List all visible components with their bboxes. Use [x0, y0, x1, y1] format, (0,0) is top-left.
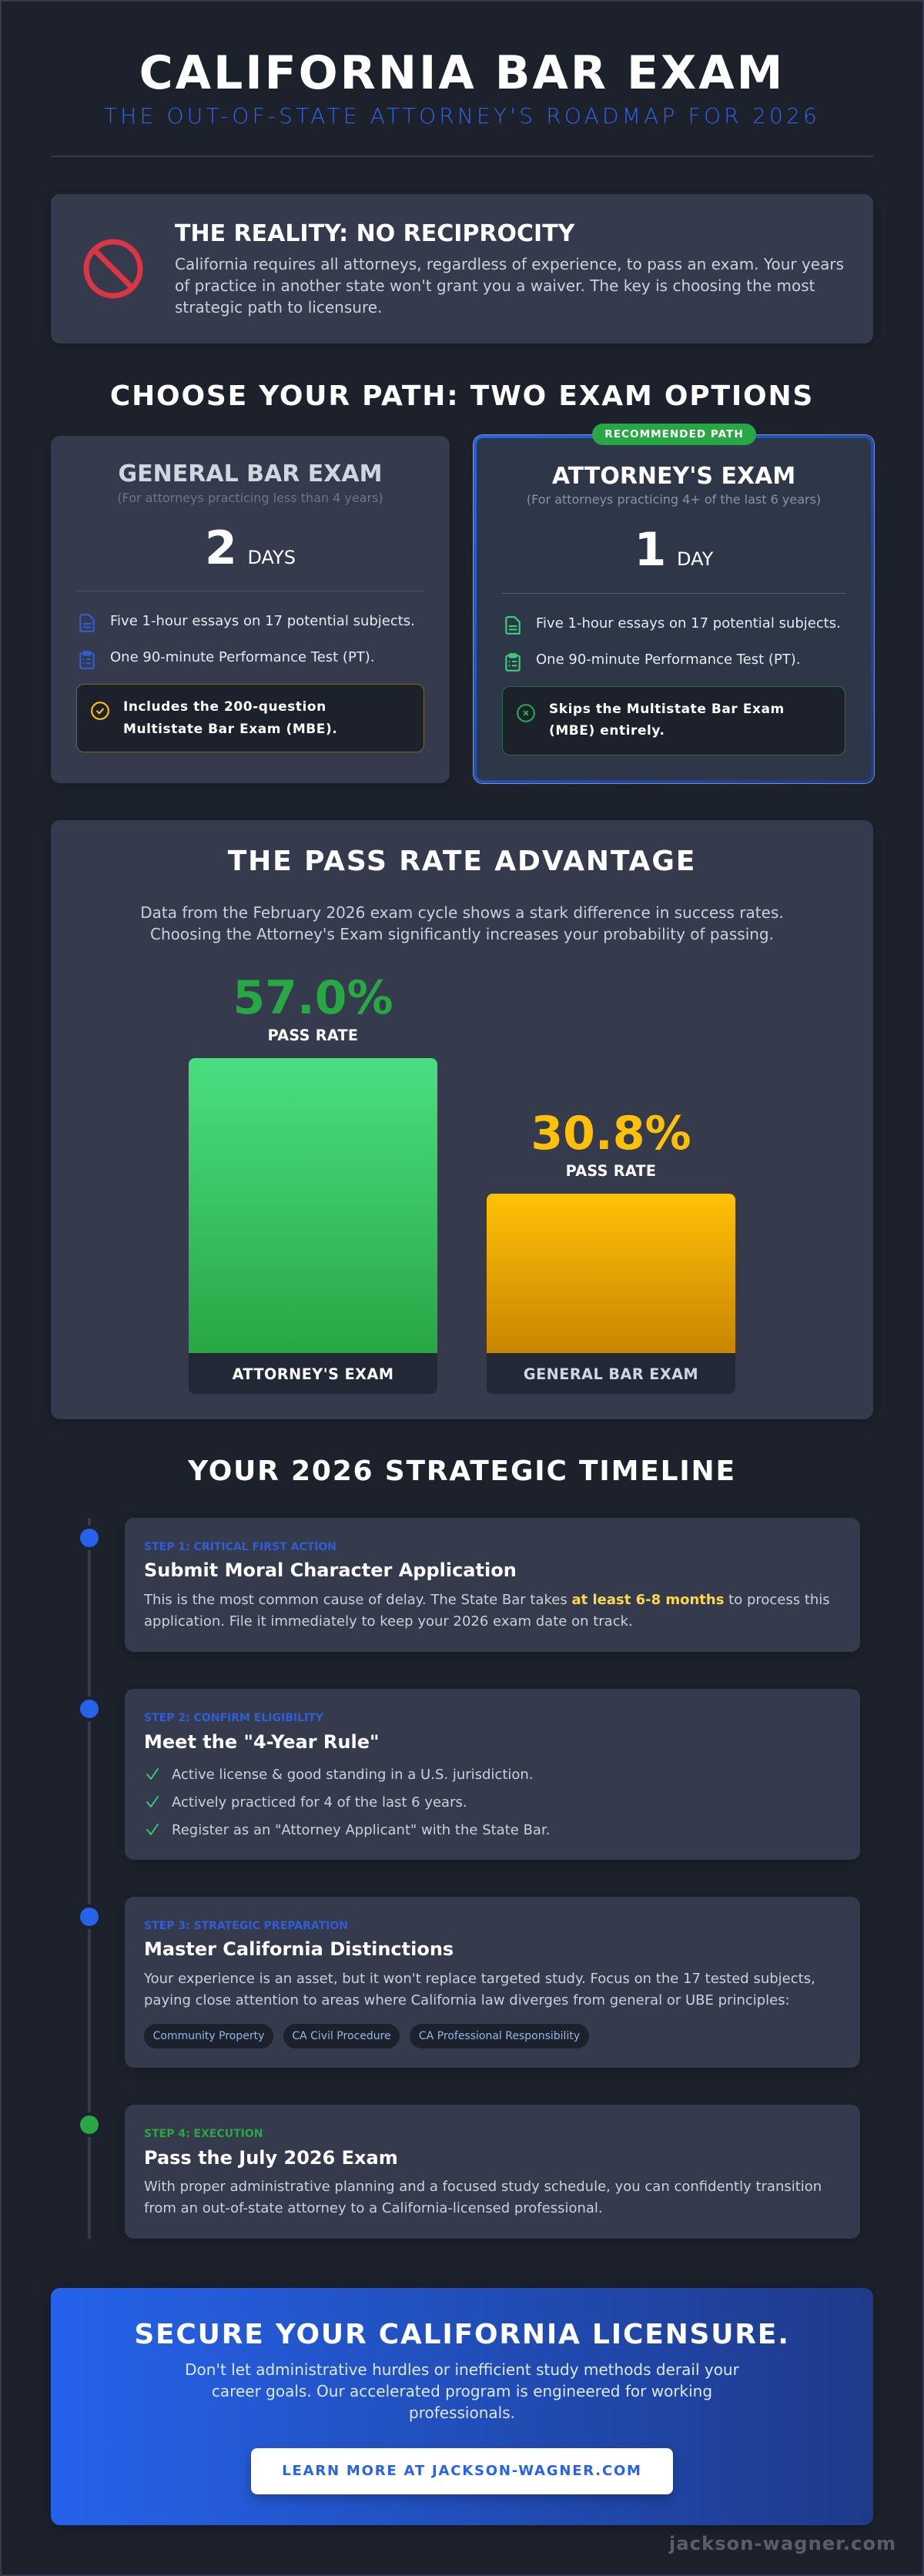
step text: With proper administrative planning and a focused study schedule, you can confidently transition: [144, 2179, 822, 2195]
cta button: LEARN MORE AT JACKSON-WAGNER.COM: [282, 2463, 642, 2479]
step text: [144, 1971, 815, 2008]
reality heading: THE REALITY: NO RECIPROCITY: [175, 220, 574, 247]
step title: Submit Moral Character Application: [144, 1559, 517, 1581]
panel: attorney's exam: [474, 435, 874, 783]
tag: [144, 2024, 273, 2048]
exam duration: 1 DAY: [634, 523, 713, 577]
icon: document: [505, 616, 521, 635]
bar: general bar exam 30.8%: [487, 1107, 735, 1394]
step text: This is the most common cause of delay. The State Bar takes at least 6-8 months to process this: [144, 1592, 830, 1608]
icon: check circle: [91, 702, 109, 720]
card title: ATTORNEY'S EXAM: [552, 463, 795, 490]
callout text: [549, 702, 785, 739]
callout text: Multistate Bar Exam (MBE).: [123, 722, 337, 737]
performance test item: One 90-minute Performance Test (PT).: [110, 649, 375, 665]
watermark: jackson-wagner.com: [669, 2533, 896, 2554]
step text: from an out-of-state attorney to a California-licensed professional.: [144, 2200, 603, 2216]
reality text: [175, 255, 844, 317]
step label: STEP 1: CRITICAL FIRST ACTION: [144, 1541, 336, 1553]
subtitle: THE OUT-OF-STATE ATTORNEY'S ROADMAP FOR 2026: [104, 103, 820, 129]
bar fill: [487, 1194, 735, 1353]
title: CALIFORNIA BAR EXAM: [139, 46, 785, 100]
heading: THE PASS RATE ADVANTAGE: [228, 846, 696, 877]
reality text: of practice in another state won't grant you a waiver. The key is choosing the most: [175, 276, 815, 295]
panel: general bar exam: [51, 436, 450, 783]
panel: call to action: [51, 2288, 873, 2525]
marker: step 2: [80, 1700, 99, 1718]
step text: application. File it immediately to keep your 2026 exam date on track.: [144, 1613, 633, 1630]
step text: Your experience is an asset, but it won't replace targeted study. Focus on the 17 tested subjects,: [144, 1971, 815, 1987]
marker: step 4: [80, 2115, 99, 2134]
heading: choose your path: CHOOSE YOUR PATH: TWO EXAM OPTIONS: [110, 380, 814, 412]
card title: GENERAL BAR EXAM: [119, 461, 382, 487]
caption: PASS RATE: [268, 1027, 358, 1044]
value: 30.8%: [531, 1107, 691, 1161]
exam duration: 2 DAYS: [205, 521, 296, 575]
step 2 card: [125, 1689, 860, 1860]
callout text: Includes the 200-question: [123, 699, 326, 715]
timeline: [80, 1518, 860, 2239]
badge: recommended path: RECOMMENDED PATH: [604, 428, 744, 440]
value: 57.0%: [233, 971, 393, 1025]
tag: CA Professional Responsibility: [419, 2030, 580, 2042]
bar chart: [189, 971, 735, 1394]
tag: [410, 2024, 589, 2048]
step title: Pass the July 2026 Exam: [144, 2147, 398, 2169]
icon: clipboard: [79, 651, 95, 669]
cta heading: SECURE YOUR CALIFORNIA LICENSURE.: [134, 2319, 790, 2350]
cta text: professionals.: [409, 2403, 515, 2422]
tag: CA Civil Procedure: [292, 2030, 391, 2042]
tag: Community Property: [153, 2030, 264, 2042]
essays item: Five 1-hour essays on 17 potential subjects.: [536, 615, 841, 631]
check item: Register as an "Attorney Applicant" with the State Bar.: [172, 1822, 550, 1838]
icon: document: [79, 614, 95, 632]
panel: pass rate advantage: [51, 820, 873, 1419]
bar label: GENERAL BAR EXAM: [524, 1365, 698, 1383]
panel: the reality no reciprocity: [51, 194, 873, 343]
marker: step 1: [80, 1529, 99, 1547]
cta text: [185, 2360, 739, 2422]
callout text: (MBE) entirely.: [549, 723, 665, 739]
essays item: Five 1-hour essays on 17 potential subjects.: [110, 613, 415, 629]
step title: Meet the "4-Year Rule": [144, 1731, 380, 1753]
check item: Actively practiced for 4 of the last 6 years.: [172, 1794, 467, 1811]
step 4 card: [125, 2105, 860, 2239]
step text: [144, 2179, 822, 2216]
reality text: strategic path to licensure.: [175, 298, 382, 317]
step 3 card: [125, 1897, 860, 2068]
card subtitle: (For attorneys practicing 4+ of the last 6 years): [527, 492, 821, 507]
cta text: Don't let administrative hurdles or inefficient study methods derail your: [185, 2360, 739, 2379]
badge: recommended path: [592, 424, 756, 445]
bar fill: [189, 1058, 437, 1353]
check item: Active license & good standing in a U.S. jurisdiction.: [172, 1767, 534, 1783]
cta button: [251, 2448, 673, 2494]
bar label: [487, 1353, 735, 1394]
header: [51, 46, 873, 157]
callout text: [123, 699, 337, 737]
marker: step 3: [80, 1908, 99, 1926]
step label: STEP 3: STRATEGIC PREPARATION: [144, 1920, 348, 1932]
bar: attorney's exam 57.0%: [189, 971, 437, 1394]
performance test item: One 90-minute Performance Test (PT).: [536, 652, 801, 668]
bar label: [189, 1353, 437, 1394]
step text: [143, 1592, 830, 1630]
caption: PASS RATE: [566, 1162, 656, 1180]
reality text: California requires all attorneys, regardless of experience, to pass an exam. Your years: [175, 255, 844, 273]
step 1 card: [125, 1518, 860, 1652]
intro text: [140, 903, 784, 943]
intro text: Data from the February 2026 exam cycle shows a stark difference in success rates.: [140, 903, 784, 922]
callout text: Skips the Multistate Bar Exam: [549, 702, 785, 717]
step text: paying close attention to areas where California law diverges from general or UBE principles:: [144, 1992, 790, 2008]
step label: STEP 4: EXECUTION: [144, 2128, 263, 2140]
bar label: ATTORNEY'S EXAM: [233, 1365, 393, 1383]
step label: STEP 2: CONFIRM ELIGIBILITY: [144, 1712, 323, 1724]
icon: clipboard: [505, 653, 521, 672]
intro text: Choosing the Attorney's Exam significantly increases your probability of passing.: [150, 925, 774, 943]
callout: includes MBE: [76, 684, 424, 752]
checklist: [146, 1767, 550, 1838]
icon: prohibited sign: [83, 239, 143, 299]
step title: Master California Distinctions: [144, 1938, 454, 1960]
card subtitle: (For attorneys practicing less than 4 years): [117, 491, 383, 505]
tag: [283, 2024, 400, 2048]
callout: skips MBE: [502, 686, 845, 755]
icon: x circle: [517, 704, 535, 722]
cta text: career goals. Our accelerated program is engineered for working: [212, 2382, 712, 2400]
heading: timeline: YOUR 2026 STRATEGIC TIMELINE: [188, 1455, 736, 1487]
